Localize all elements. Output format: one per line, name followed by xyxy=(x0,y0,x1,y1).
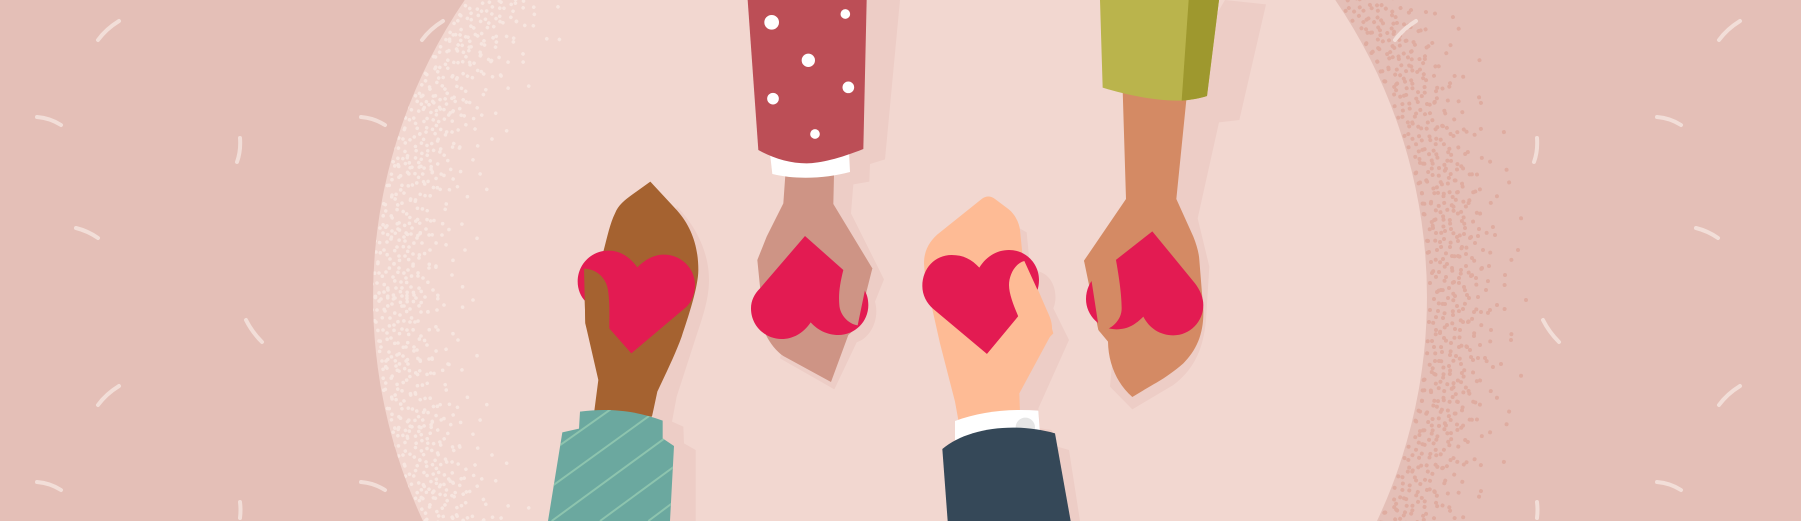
hand: brown with teal sleeve and heart xyxy=(548,182,709,521)
olive sleeve xyxy=(1100,0,1219,101)
heart xyxy=(1086,231,1203,335)
brown hand xyxy=(584,182,698,417)
peach hand xyxy=(924,196,1052,420)
stipple dots: inside circle left xyxy=(373,0,561,521)
heart xyxy=(751,236,868,339)
thumb xyxy=(987,261,1053,354)
navy sleeve xyxy=(942,428,1071,521)
thumb xyxy=(1084,260,1122,331)
polka dots xyxy=(764,9,854,139)
shadow xyxy=(1000,228,1080,521)
central light circle xyxy=(373,0,1427,521)
heart xyxy=(578,251,695,353)
shadow xyxy=(780,0,900,389)
hand: rosy with red polka dot sleeve and heart xyxy=(748,0,900,389)
olive sleeve dark side xyxy=(1182,0,1219,101)
shadow xyxy=(1110,0,1266,409)
red sleeve xyxy=(748,0,867,163)
heart xyxy=(922,250,1039,354)
thumb xyxy=(584,269,609,367)
tan hand xyxy=(1084,90,1203,397)
shadow xyxy=(653,207,709,521)
stipple dots: right of circle xyxy=(1344,0,1528,521)
teal sleeve with stripes xyxy=(548,409,674,521)
white shirt cuff xyxy=(955,410,1040,440)
white cuff xyxy=(770,152,850,178)
hand: peach with navy suit sleeve and heart xyxy=(922,196,1080,521)
rosy hand xyxy=(757,175,872,382)
thumb xyxy=(839,253,872,325)
cuff button xyxy=(1016,418,1035,429)
hand: tan with olive sleeve and heart xyxy=(1084,0,1266,409)
